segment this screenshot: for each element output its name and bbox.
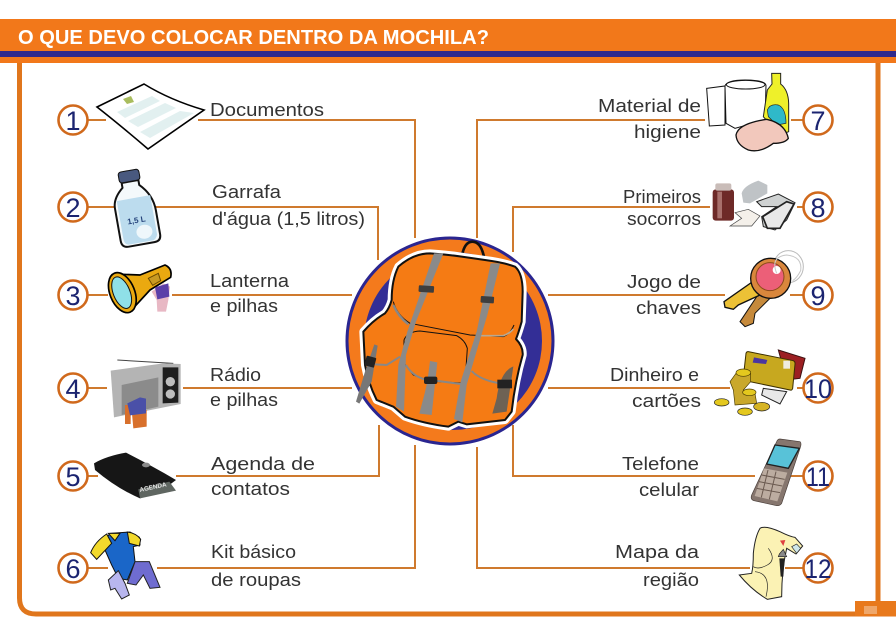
header band	[0, 19, 896, 63]
label	[211, 542, 301, 590]
label	[627, 272, 701, 318]
number 3	[58, 280, 88, 311]
page number tab	[855, 601, 896, 616]
label: Jogo de	[627, 272, 701, 292]
label	[610, 365, 701, 411]
number 2	[58, 192, 88, 223]
number 9: 9	[810, 281, 826, 311]
title: O QUE DEVO COLOCAR DENTRO DA MOCHILA?	[18, 27, 489, 49]
item 9: chaves	[627, 251, 832, 327]
label: higiene	[634, 122, 701, 142]
item 10: dinheiro e cartoes	[610, 350, 832, 415]
label: Documentos	[210, 100, 324, 120]
label: Lanterna	[210, 271, 290, 291]
label: região	[643, 570, 699, 590]
icon: keys	[724, 251, 803, 327]
item 3: lanterna	[58, 265, 290, 317]
label: Garrafa	[212, 182, 282, 202]
label: Agenda de	[211, 454, 315, 474]
number 6	[58, 554, 88, 584]
icon: document	[97, 84, 204, 149]
number 3: 3	[65, 281, 81, 311]
backpack	[356, 242, 523, 427]
label: Kit básico	[211, 542, 296, 562]
number 4	[58, 374, 88, 404]
label	[615, 542, 700, 590]
item 11: telefone	[622, 439, 832, 506]
number 2: 2	[65, 193, 81, 223]
icon: water bottle: 1,5 L	[127, 214, 146, 226]
item 2: garrafa	[58, 167, 365, 248]
label: contatos	[211, 479, 290, 499]
label	[598, 96, 701, 142]
number 11: 11	[806, 462, 830, 492]
label: Mapa da	[615, 542, 700, 562]
number 9	[804, 280, 832, 311]
label: Primeiros	[623, 187, 701, 207]
icon: radio	[111, 360, 181, 428]
icon: black agenda: AGENDA	[139, 481, 168, 494]
icon: mobile phone	[751, 439, 801, 506]
icon: black agenda	[94, 453, 176, 498]
label: e pilhas	[210, 296, 278, 316]
label: de roupas	[211, 570, 301, 590]
number 8	[804, 192, 832, 223]
label	[622, 454, 699, 500]
item 8: primeiros socorros	[623, 181, 832, 230]
label	[623, 187, 701, 229]
number 8: 8	[810, 193, 826, 223]
icon: map scroll	[739, 527, 803, 599]
number 7	[804, 106, 832, 136]
label: Material de	[598, 96, 701, 116]
label	[211, 454, 315, 499]
number 1	[58, 106, 88, 136]
label: chaves	[636, 298, 701, 318]
label	[212, 182, 365, 229]
label: Telefone	[622, 454, 699, 474]
label: celular	[639, 480, 699, 500]
number 4: 4	[65, 374, 81, 404]
item 5: agenda	[58, 453, 315, 499]
item 12: mapa	[615, 527, 832, 599]
item 1: documentos	[58, 84, 324, 149]
number 5: 5	[65, 462, 81, 492]
label: socorros	[627, 209, 701, 229]
icon: flashlight	[103, 265, 171, 317]
icon: clothes	[91, 532, 160, 599]
label	[210, 365, 278, 410]
icon: water bottle	[109, 167, 161, 248]
icon: first aid supplies	[713, 181, 795, 230]
backpack emblem	[347, 238, 553, 444]
icon: toilet paper, shampoo and soap	[707, 73, 789, 151]
item 6: roupas	[58, 532, 301, 599]
label: Dinheiro e	[610, 365, 699, 385]
label: cartões	[632, 391, 701, 411]
item 7: higiene	[598, 73, 832, 151]
label	[210, 271, 290, 316]
label: e pilhas	[210, 390, 278, 410]
number 12: 12	[804, 554, 832, 584]
item 4: radio	[58, 360, 278, 428]
label: d'água (1,5 litros)	[212, 209, 365, 229]
number 5	[58, 462, 88, 492]
number 6: 6	[65, 554, 81, 584]
icon: money and cards	[714, 350, 805, 415]
label: Rádio	[210, 365, 261, 385]
connector lines	[87, 120, 804, 568]
number 7: 7	[810, 106, 826, 136]
number 10: 10	[804, 374, 832, 404]
number 1: 1	[65, 106, 81, 136]
